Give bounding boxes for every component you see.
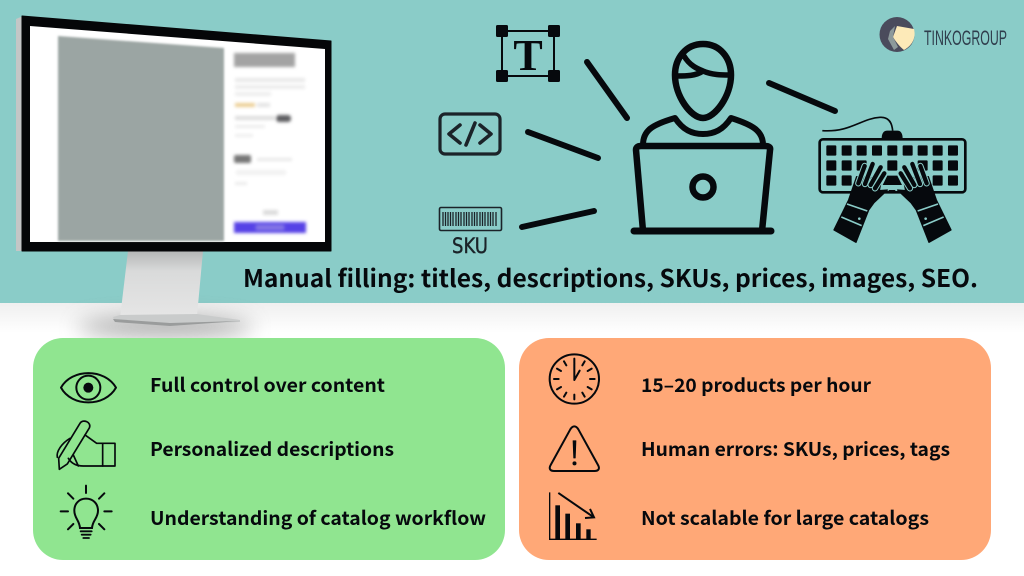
benefit: understanding: Understanding of catalog workflow: [150, 504, 486, 531]
icon: text tool: [496, 25, 560, 82]
icon: eye: [61, 373, 116, 402]
monitor mockup: [16, 16, 331, 336]
connector lines: [522, 62, 835, 227]
drawback: scalability: Not scalable for large catalogs: [641, 504, 929, 531]
icon: hand writing: [57, 421, 115, 469]
benefit: personalized: Personalized descriptions: [150, 435, 394, 462]
icon: SKU barcode: [440, 208, 502, 258]
monitor frame: [16, 16, 24, 251]
background: white floor: [0, 303, 1024, 576]
hair: [677, 56, 729, 76]
left hand: [834, 164, 887, 242]
panel: benefits: [33, 338, 505, 560]
background: teal header: [0, 0, 1024, 303]
icon: SKU barcode: SKU: [452, 234, 488, 258]
laptop: [636, 146, 770, 231]
drawback: speed: 15–20 products per hour: [641, 371, 872, 398]
monitor bezel: [22, 16, 331, 251]
monitor stand: [113, 251, 240, 326]
icon: keyboard with hands: [820, 117, 965, 242]
panel: drawbacks: [519, 338, 991, 560]
drawback: errors: Human errors: SKUs, prices, tags: [641, 435, 950, 462]
benefit: full control: Full control over content: [150, 371, 385, 398]
icon: clock: [550, 354, 599, 404]
monitor screen: [30, 26, 325, 242]
icon: code: [440, 114, 500, 154]
blurred product image: [58, 36, 224, 241]
keys: [826, 145, 958, 193]
cable: [822, 117, 893, 131]
icon: declining chart: [550, 492, 597, 539]
logo mark: [880, 17, 915, 52]
keyboard body: [820, 139, 965, 192]
monitor shadow: [77, 318, 253, 336]
panel background: orange: [519, 338, 991, 560]
shoulders: [643, 118, 763, 145]
icon: person at laptop: [634, 44, 771, 231]
panel background: green: [33, 338, 505, 560]
headline: Manual filling: titles, descriptions, SKUs, prices, images, SEO.: [243, 259, 978, 294]
right hand: [898, 164, 951, 242]
logo: Tinkogroup: [880, 17, 1007, 52]
icon: text tool: T: [513, 31, 543, 80]
icon: light bulb: [61, 486, 112, 538]
icon: warning triangle: [550, 426, 599, 471]
head: [675, 44, 731, 118]
blurred product details: [234, 53, 306, 233]
